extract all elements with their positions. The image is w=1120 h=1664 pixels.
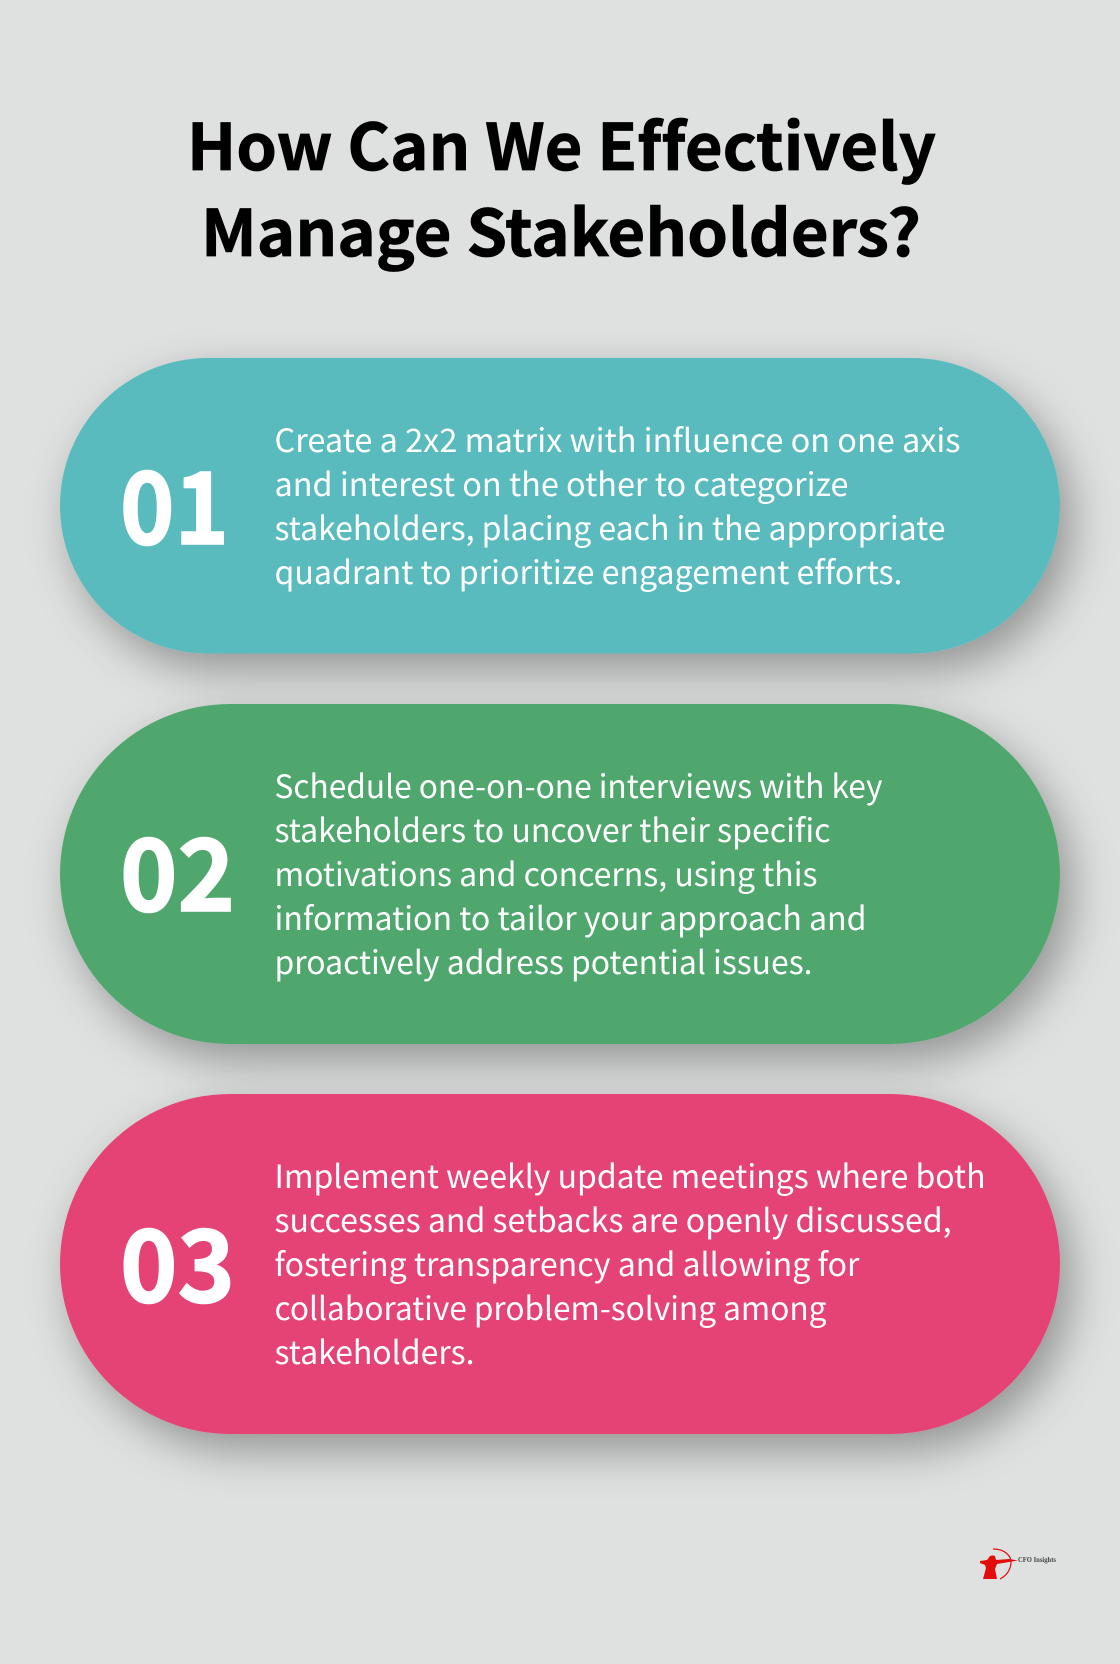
- panel: step 01: [60, 358, 1060, 654]
- text block: step 01 description: stakeholders, placing each in the appropriate: [274, 504, 946, 550]
- text block: step 02 description: information to tailor your approach and: [274, 894, 866, 940]
- pill background: step 02: [60, 704, 1060, 1044]
- text block: step 03 description: Implement weekly update meetings where both: [274, 1152, 986, 1198]
- text block: step 01 description: [274, 416, 960, 594]
- text block: step 03 description: fostering transparency and allowing for: [274, 1240, 860, 1286]
- logo: CFO Insights: [980, 1549, 1056, 1579]
- pill background: step 03: [60, 1094, 1060, 1434]
- text block: step 02 description: motivations and concerns, using this: [274, 850, 818, 896]
- text block: step 02 description: stakeholders to uncover their specific: [274, 806, 830, 852]
- text block: step 01 description: and interest on the other to categorize: [274, 460, 849, 506]
- number: 03: 03: [120, 1186, 235, 1331]
- text block: step 03 description: [274, 1152, 986, 1374]
- panel: step 02: [60, 704, 1060, 1044]
- text block: step 03 description: stakeholders.: [274, 1328, 474, 1374]
- title: [187, 97, 936, 275]
- text block: step 01 description: Create a 2x2 matrix with influence on one axis: [274, 416, 960, 462]
- number: 02: 02: [120, 795, 235, 940]
- text block: step 02 description: Schedule one-on-one interviews with key: [274, 762, 883, 808]
- panel: step 03: [60, 1094, 1060, 1434]
- text: CFO Insights: CFO Insights: [1018, 1555, 1056, 1564]
- text block: step 03 description: collaborative problem-solving among: [274, 1284, 826, 1330]
- number: 01: 01: [120, 428, 229, 573]
- text block: step 02 description: proactively address potential issues.: [274, 938, 812, 984]
- icon: red archer: [980, 1549, 1018, 1579]
- text block: step 01 description: quadrant to prioritize engagement efforts.: [274, 548, 902, 594]
- title: How Can We Effectively: [187, 97, 936, 189]
- text block: step 03 description: successes and setbacks are openly discussed,: [274, 1196, 952, 1242]
- title: Manage Stakeholders?: [201, 183, 921, 275]
- text block: step 02 description: [274, 762, 883, 984]
- pill background: step 01: [60, 358, 1060, 654]
